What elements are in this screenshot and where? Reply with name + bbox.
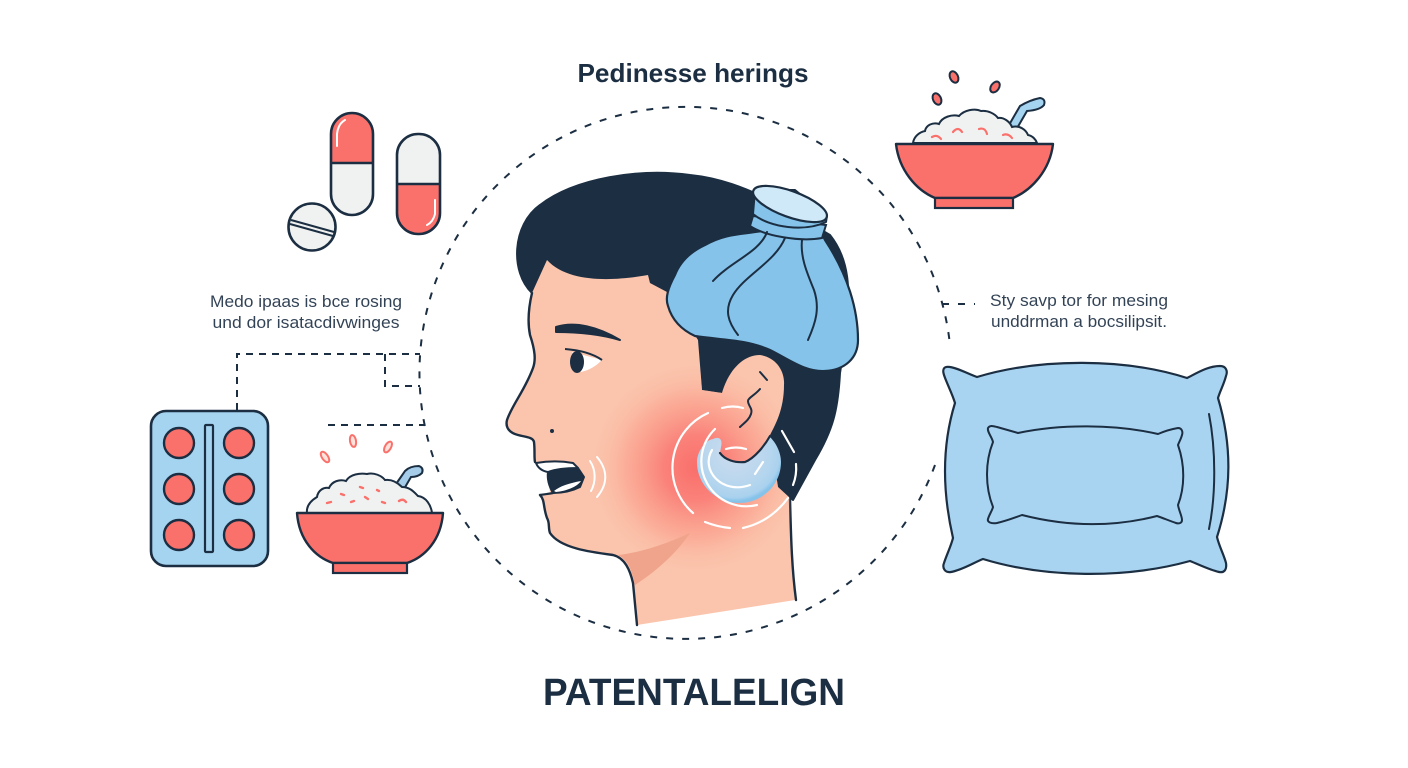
neck shadow [618, 533, 690, 585]
rice bowl, left [297, 435, 443, 573]
mouth [536, 462, 584, 495]
capsule: red top [331, 113, 373, 215]
face outline [507, 293, 796, 625]
text: und dor isatacdivwinges [212, 314, 400, 332]
right callout text: Sty savp tor for mesing [990, 292, 1168, 310]
cheek redness [610, 368, 790, 554]
blister pack icon [151, 411, 268, 566]
title: Pedinesse herings [578, 58, 808, 88]
right connector line [942, 303, 975, 305]
bottom heading: PATENTALELIGN [543, 672, 845, 714]
ear lobe edge [720, 436, 770, 462]
pain arcs [672, 406, 796, 528]
tablet [288, 204, 336, 250]
sound waves [590, 457, 605, 497]
eye [565, 349, 602, 373]
eyebrow [556, 325, 620, 340]
nostril [550, 429, 554, 433]
ice bag [667, 178, 858, 371]
left callout text: Medo ipaas is bce rosing [210, 293, 402, 311]
hair [517, 173, 848, 500]
face [507, 260, 795, 625]
capsule: red bottom [397, 134, 440, 234]
beans [931, 70, 1002, 106]
left connector lines [237, 354, 425, 425]
ear creases [740, 372, 767, 427]
rice grains [319, 435, 394, 464]
capsules and tablet icon [288, 113, 440, 250]
rice bowl, top right [896, 70, 1053, 208]
cold pack on jaw [697, 437, 781, 503]
dashed circle [419, 107, 950, 639]
text: unddrman a bocsilipsit. [991, 313, 1167, 331]
head illustration [507, 173, 858, 625]
pillow icon [943, 363, 1228, 574]
